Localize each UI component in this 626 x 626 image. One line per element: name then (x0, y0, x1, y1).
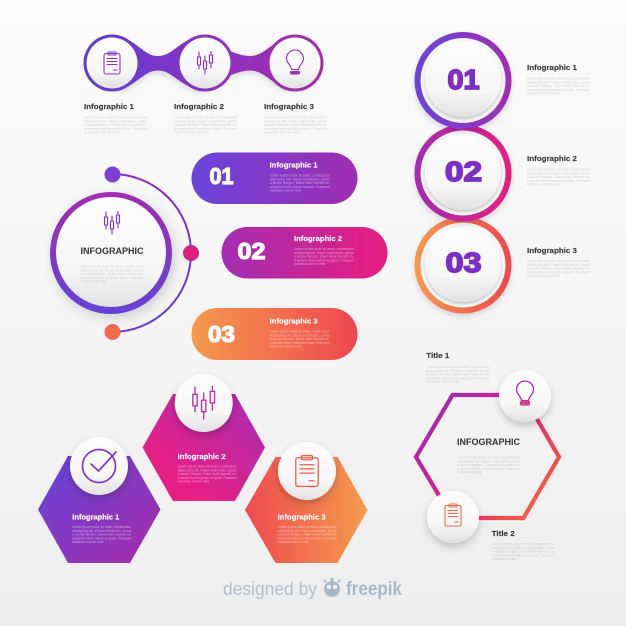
circle 03: 03 (446, 247, 482, 278)
label 2: Lorem ipsum dolor sit amet, consectetur (527, 168, 591, 172)
title 1 block: a laoreet lorem ipsum eu justo. Praesent (426, 376, 489, 380)
panel: hexagon 2: Lorem ipsum dolor sit amet, consectetur (178, 464, 238, 468)
panel: pill 03 (192, 308, 358, 360)
caption 2: a auctor tempor. Diam dolor laoreet mi, (174, 123, 237, 127)
panel: hexagon 3: adipiscing elit. Etiam sollicitudin, purus (278, 529, 337, 533)
panel: pill 03: adipiscing elit. Etiam sollicitudin, purus (270, 333, 330, 337)
panel: central circle with arc (50, 166, 199, 340)
panel: pill 03: Lorem ipsum dolor sit amet, consectetur (270, 330, 331, 334)
body text: maximus rutrum velit. (80, 280, 106, 284)
icon: candlestick chart (104, 212, 120, 234)
panel: hexagon 3: a laoreet lorem ipsum eu justo. Praesent (278, 536, 337, 540)
title 2 block: Lorem ipsum dolor sit amet, consectetur (492, 542, 556, 546)
label 1: a auctor tempor. Diam dolor laoreet mi, (527, 84, 590, 88)
panel: hexagon 2 (142, 374, 265, 501)
panel: top horizontal timeline (84, 34, 328, 135)
panel: pill 01: Infographic 1 (270, 160, 318, 170)
panel: hexagon 1: maximus rutrum velit. (72, 540, 104, 544)
label 1: a laoreet lorem ipsum eu justo. Praesent (527, 88, 590, 92)
panel: hexagon 1: a laoreet lorem ipsum eu justo. Praesent (72, 536, 131, 540)
panel: hexagon 1: a auctor tempor. Diam dolor laoreet mi, (72, 533, 131, 537)
purple connector (120, 36, 288, 90)
caption 2 (174, 102, 238, 135)
panel: pill 02: a laoreet lorem ipsum eu justo. Praesent (294, 258, 354, 262)
body text: a laoreet lorem ipsum eu justo. Praesent (80, 276, 144, 280)
panel: pill 03: Infographic 3 (270, 316, 318, 326)
panel: pill 01: a laoreet lorem ipsum eu justo. Praesent (270, 185, 330, 189)
label 2 (527, 154, 591, 187)
body text: a auctor tempor. Diam dolor laoreet mi, (457, 463, 520, 467)
icon: candlestick chart (198, 52, 212, 74)
panel: pill 02: Infographic 2 (294, 234, 342, 243)
caption 2: Lorem ipsum dolor sit amet, consectetur (174, 116, 238, 120)
bulb button (499, 370, 551, 422)
label 3: Infographic 3 (527, 246, 577, 255)
icon: freepik mascot (322, 578, 342, 597)
title 1 block: Lorem ipsum dolor sit amet, consectetur (426, 365, 490, 369)
label 1: adipiscing elit. Etiam sollicitudin, purus (527, 80, 590, 84)
caption 1: adipiscing elit. Etiam sollicitudin, purus (84, 119, 147, 123)
caption 3: Lorem ipsum dolor sit amet, consectetur (264, 116, 328, 120)
icon: candlestick chart (193, 386, 215, 419)
body text: adipiscing elit. Etiam sollicitudin, purus (457, 459, 520, 463)
panel: outlined hexagon (416, 351, 559, 561)
arc (112, 174, 191, 332)
label 3: Lorem ipsum dolor sit amet, consectetur (527, 259, 591, 263)
panel: pill 01 (192, 152, 358, 204)
caption 2: a laoreet lorem ipsum eu justo. Praesent (174, 127, 237, 131)
ring with disc (50, 192, 172, 314)
label 2: a laoreet lorem ipsum eu justo. Praesent (527, 179, 590, 183)
panel: hexagon 3: Lorem ipsum dolor sit amet, consectetur (278, 525, 338, 529)
caption 1: Infographic 1 (84, 102, 135, 111)
panel: hexagon 3: Infographic 3 (278, 512, 326, 522)
panel: hexagon 1 (38, 437, 160, 563)
label 3: adipiscing elit. Etiam sollicitudin, purus (527, 263, 590, 267)
caption 1: a auctor tempor. Diam dolor laoreet mi, (84, 123, 147, 127)
label 1: Lorem ipsum dolor sit amet, consectetur (527, 76, 591, 80)
caption 3: Infographic 3 (264, 102, 314, 111)
panel: pill 02: Lorem ipsum dolor sit amet, consectetur (294, 247, 355, 251)
panel: pill 03: a laoreet lorem ipsum eu justo. Praesent (270, 341, 330, 345)
label 2: maximus rutrum velit. (527, 183, 561, 187)
heading: INFOGRAPHIC (80, 245, 144, 256)
panel: pill 02: 02 (238, 238, 266, 264)
panel: numbered circles column (414, 32, 591, 314)
label 3: a laoreet lorem ipsum eu justo. Praesent (527, 270, 590, 274)
panel: hexagon 2: adipiscing elit. Etiam sollicitudin, purus (178, 468, 237, 472)
title 2 block: maximus rutrum velit. (492, 557, 516, 561)
title 2 block: a auctor tempor. Diam dolor laoreet mi, (492, 550, 555, 554)
title 2 block: Title 2 (492, 529, 515, 538)
caption 1: maximus rutrum velit. (84, 131, 120, 135)
panel: hexagon 1: Lorem ipsum dolor sit amet, consectetur (72, 525, 132, 529)
label 2: a auctor tempor. Diam dolor laoreet mi, (527, 175, 590, 179)
panel: pill 01: 01 (210, 163, 234, 189)
label 1: maximus rutrum velit. (527, 92, 561, 96)
dot middle (183, 245, 199, 261)
label 2: Infographic 2 (527, 154, 577, 163)
body text: maximus rutrum velit. (457, 471, 482, 475)
step 3 circle (266, 34, 324, 92)
panel: pill 01: a auctor tempor. Diam dolor laoreet mi, (270, 181, 330, 185)
caption 3: a auctor tempor. Diam dolor laoreet mi, (264, 123, 327, 127)
panel: pill 03: maximus rutrum velit. (270, 345, 302, 349)
icon: clipboard (104, 52, 120, 74)
panel: hexagon 1: adipiscing elit. Etiam sollicitudin, purus (72, 529, 132, 533)
panel: hexagon 2: Infographic 2 (178, 452, 226, 461)
panel: hexagon 3 (245, 442, 368, 563)
panel: pill 03: a auctor tempor. Diam dolor laoreet mi, (270, 337, 330, 341)
step 1 circle (84, 34, 140, 92)
panel: pill 02 (222, 227, 388, 278)
panel: hexagon 3: a auctor tempor. Diam dolor laoreet mi, (278, 533, 337, 537)
body text: Lorem ipsum dolor sit amet, consectetur (457, 456, 521, 460)
label 3: a auctor tempor. Diam dolor laoreet mi, (527, 267, 590, 271)
dot bottom (104, 324, 120, 340)
dot top (104, 166, 120, 182)
panel: hexagon 2: a auctor tempor. Diam dolor laoreet mi, (178, 472, 237, 476)
circle 02: 02 (445, 156, 482, 187)
panel: pill 01: Lorem ipsum dolor sit amet, consectetur (270, 174, 331, 178)
title 1 block: maximus rutrum velit. (426, 380, 460, 384)
icon: check mark (82, 450, 116, 482)
panel: pill 01: adipiscing elit. Etiam sollicitudin, purus (270, 177, 330, 181)
caption 2: Infographic 2 (174, 102, 224, 111)
panel: pill 01: maximus rutrum velit. (270, 189, 302, 193)
title 1 block: adipiscing elit. Etiam sollicitudin, purus (426, 369, 490, 373)
caption 3: adipiscing elit. Etiam sollicitudin, purus (264, 119, 327, 123)
label 3 (527, 246, 591, 278)
panel: hexagon 2: maximus rutrum velit. (178, 480, 210, 484)
footer credit (223, 578, 402, 600)
body text: Lorem ipsum dolor sit amet, consectetur (80, 264, 144, 268)
caption 1: Lorem ipsum dolor sit amet, consectetur (84, 116, 148, 120)
panel: hexagon 1: Infographic 1 (72, 512, 120, 522)
panel: hexagon 2: a laoreet lorem ipsum eu justo. Praesent (178, 476, 237, 480)
title 2 block: adipiscing elit. Etiam sollicitudin, purus (492, 546, 555, 550)
footer credit: designed by (223, 579, 317, 599)
step 2 circle (176, 34, 234, 92)
panel: pill 03: 03 (208, 321, 235, 347)
panel: hexagon 3: maximus rutrum velit. (278, 540, 310, 544)
panel: pill 02: a auctor tempor. Diam dolor laoreet mi, (294, 255, 354, 259)
title 1 block (426, 351, 490, 384)
title 2 block (492, 529, 556, 561)
panel: pill 02: adipiscing elit. Etiam sollicitudin, purus (294, 251, 354, 255)
body text: a auctor tempor. Diam dolor laoreet mi, (80, 272, 144, 276)
caption 3: maximus rutrum velit. (264, 131, 300, 135)
title 1 block: a auctor tempor. Diam dolor laoreet mi, (426, 373, 489, 377)
label 3: maximus rutrum velit. (527, 274, 561, 278)
circle 01 (414, 32, 512, 129)
icon: light bulb (286, 50, 304, 74)
panel: pill 02: maximus rutrum velit. (294, 262, 326, 266)
title 1 block: Title 1 (426, 351, 450, 360)
circle 02 (414, 124, 512, 222)
clipboard button (427, 491, 479, 543)
label 1: Infographic 1 (527, 63, 578, 72)
caption 3 (264, 102, 328, 135)
body text: adipiscing elit. Etiam sollicitudin, purus (80, 268, 144, 272)
circle 01: 01 (448, 64, 480, 95)
footer credit: freepik (346, 579, 402, 600)
hexagon outline (416, 395, 559, 518)
caption 1 (84, 102, 148, 135)
heading: INFOGRAPHIC (457, 436, 520, 447)
caption 3: a laoreet lorem ipsum eu justo. Praesent (264, 127, 327, 131)
body text: a laoreet lorem ipsum eu justo. Praesent (457, 467, 520, 471)
title 2 block: a laoreet lorem ipsum eu justo. Praesent (492, 553, 555, 557)
label 1 (527, 63, 591, 96)
label 2: adipiscing elit. Etiam sollicitudin, purus (527, 171, 590, 175)
circle 03 (414, 216, 512, 314)
caption 2: adipiscing elit. Etiam sollicitudin, purus (174, 119, 237, 123)
icon: clipboard (296, 456, 318, 486)
caption 1: a laoreet lorem ipsum eu justo. Praesent (84, 127, 147, 131)
caption 2: maximus rutrum velit. (174, 131, 210, 135)
